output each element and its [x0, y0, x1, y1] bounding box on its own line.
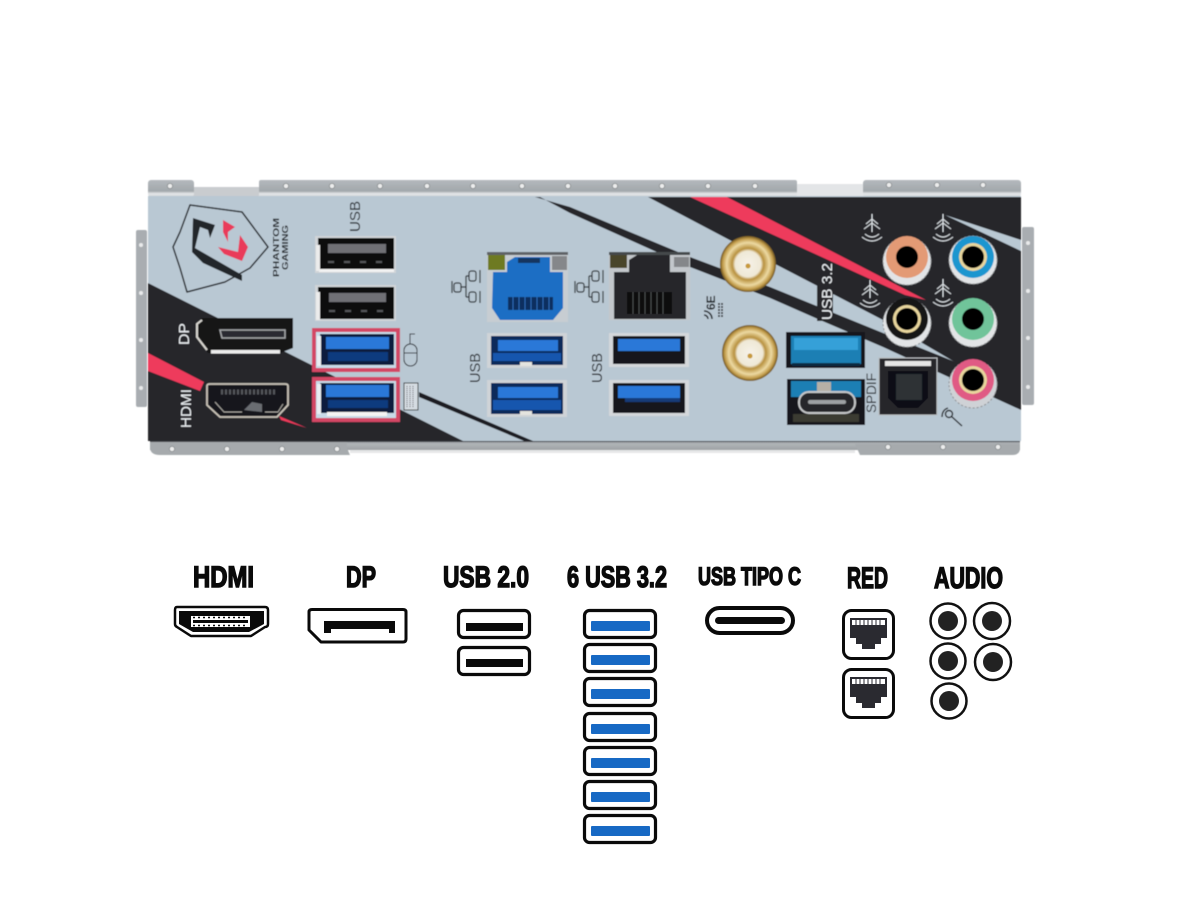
top metal strip — [148, 180, 1021, 197]
bottom metal strip — [150, 440, 1020, 455]
icon: wifi 6E — [704, 295, 722, 319]
logo wordmark: GAMING — [281, 225, 290, 270]
port: DisplayPort — [197, 318, 293, 354]
label: USB middle: USB — [467, 353, 484, 383]
icon: USB 3.2 ports — [584, 610, 656, 842]
port: USB 3.2 middle lower — [487, 380, 567, 417]
icon: keyboard — [404, 383, 418, 410]
logo wordmark — [272, 218, 290, 277]
icon: mouse — [404, 334, 417, 366]
left side tab — [136, 230, 147, 407]
red stripe upper — [690, 197, 926, 300]
port: audio blue jack — [949, 236, 997, 284]
right side tab — [1022, 227, 1034, 405]
dark graphic: diagonal band — [535, 197, 1021, 410]
port: gold antenna connector upper — [720, 236, 776, 292]
heading: DP: DP — [346, 561, 376, 594]
heading: HDMI: HDMI — [193, 561, 254, 594]
heading: USB TIPO C: USB TIPO C — [698, 563, 801, 591]
icon: USB-C port — [707, 608, 793, 633]
logo wordmark: PHANTOM — [272, 218, 281, 277]
port: SPDIF optical — [879, 358, 937, 415]
port: RJ45 black — [609, 252, 690, 320]
icon: audio wave top left — [862, 214, 882, 241]
icon: network right — [575, 270, 603, 303]
port: audio green jack — [949, 298, 997, 347]
port: USB 2.0 bottom — [315, 285, 396, 321]
icon: network left — [452, 270, 480, 303]
heading: 6 USB 3.2: 6 USB 3.2 — [567, 561, 667, 594]
icon: microphone — [942, 408, 962, 426]
port: USB 3.2 teal — [786, 332, 865, 368]
port: audio black jack — [883, 298, 931, 347]
icon: DisplayPort port — [309, 610, 406, 642]
port: audio orange jack — [883, 236, 931, 285]
port: USB 3.2 right lower — [609, 380, 689, 416]
label: HDMI: HDMI — [178, 389, 195, 428]
dark box behind USB 3.2 label — [817, 283, 833, 321]
red stripe small — [279, 416, 307, 428]
icon: HDMI port — [175, 607, 268, 636]
port: USB 3.2 middle upper — [487, 333, 567, 368]
dark graphic: upper right area — [648, 197, 1021, 410]
heading: RED: RED — [847, 562, 888, 595]
label: USB right: USB — [589, 353, 606, 383]
label: USB top: USB — [347, 201, 364, 232]
light wedge upper right — [945, 215, 1021, 251]
icon: network ports — [844, 610, 894, 718]
heading: USB 2.0: USB 2.0 — [443, 561, 529, 594]
port: gold antenna connector lower — [722, 325, 778, 381]
icon: audio jacks — [930, 603, 1011, 718]
port: USB 3.2 red frame mouse — [314, 330, 398, 370]
dark graphic: lower left wedge — [148, 283, 463, 441]
port: audio pink jack — [949, 359, 997, 408]
label: SPDIF: SPDIF — [863, 373, 879, 413]
logo: Phantom Gaming — [173, 205, 290, 292]
heading: AUDIO: AUDIO — [934, 562, 1003, 595]
icon: audio wave top right — [933, 214, 953, 241]
port: USB 3.2 right upper — [609, 333, 689, 367]
icon: USB 2.0 ports — [458, 610, 530, 674]
port: USB-C — [787, 379, 865, 425]
port: RJ45 blue — [487, 252, 568, 322]
panel: motherboard rear I/O photo — [136, 180, 1034, 455]
port: USB 3.2 red frame keyboard — [314, 379, 398, 420]
icon: audio wave middle left — [860, 280, 880, 307]
port: USB 2.0 top — [315, 236, 396, 273]
icon: audio wave middle right — [933, 279, 953, 306]
label: USB 3.2: USB 3.2 — [819, 263, 836, 320]
label: DP: DP — [176, 323, 193, 345]
faceplate — [148, 196, 1021, 441]
dark graphic: thin lower stripe — [419, 392, 533, 441]
port: HDMI — [207, 384, 288, 417]
icon: wifi 6E: 6E — [704, 295, 718, 310]
red stripe left — [148, 353, 204, 391]
